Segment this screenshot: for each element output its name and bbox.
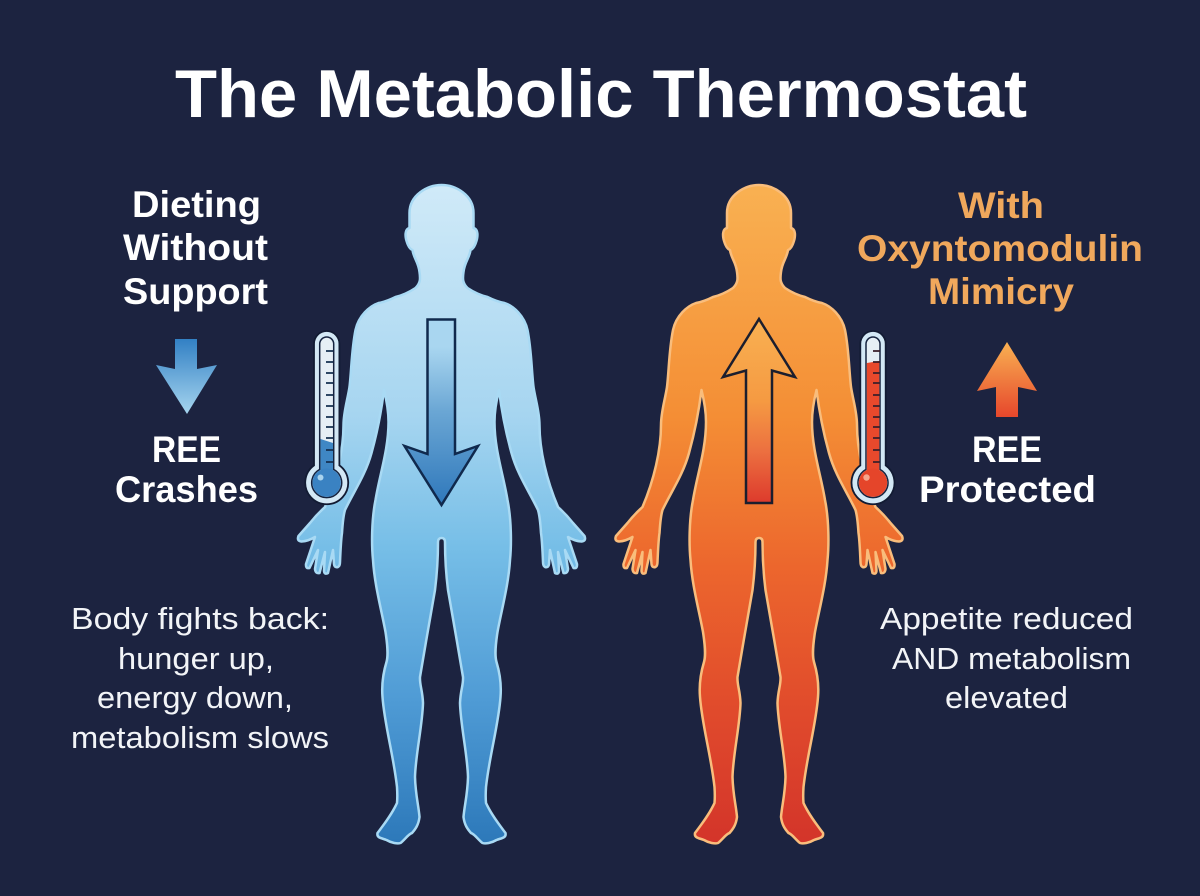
text block: right description (880, 601, 1133, 715)
icon: red thermometer (852, 331, 894, 504)
text block: left description: energy down, (97, 680, 293, 715)
text block: left description: hunger up, (118, 641, 274, 676)
panel: right heading (857, 185, 1143, 312)
text block: left description (71, 601, 329, 755)
text block: right description: Appetite reduced (880, 601, 1133, 636)
label: REE protected: Protected (919, 469, 1096, 510)
label: REE crashes (115, 429, 258, 510)
panel: left heading: Dieting (132, 184, 261, 225)
icon: small up arrow (977, 342, 1037, 417)
text block: right description: elevated (945, 680, 1068, 715)
panel: right heading: With (958, 185, 1044, 226)
icon: small down arrow (156, 339, 217, 414)
text block: left description: Body fights back: (71, 601, 329, 636)
text block: left description: metabolism slows (71, 720, 329, 755)
panel: left heading: Without (123, 227, 268, 268)
label: REE crashes: REE (152, 429, 221, 470)
title: The Metabolic Thermostat (175, 56, 1027, 132)
arrow: large up arrow on orange body (723, 319, 795, 503)
panel: left heading (123, 184, 268, 312)
panel: left heading: Support (123, 271, 268, 312)
panel: right heading: Mimicry (928, 271, 1074, 312)
label: REE protected (919, 429, 1096, 510)
figure: orange body silhouette (615, 185, 903, 843)
panel: right heading: Oxyntomodulin (857, 228, 1143, 269)
text block: right description: AND metabolism (892, 641, 1131, 676)
arrow: large down arrow on blue body (404, 320, 478, 505)
label: REE protected: REE (972, 429, 1042, 470)
figure: blue body silhouette (298, 185, 585, 843)
icon: blue thermometer (305, 331, 348, 504)
label: REE crashes: Crashes (115, 469, 258, 510)
